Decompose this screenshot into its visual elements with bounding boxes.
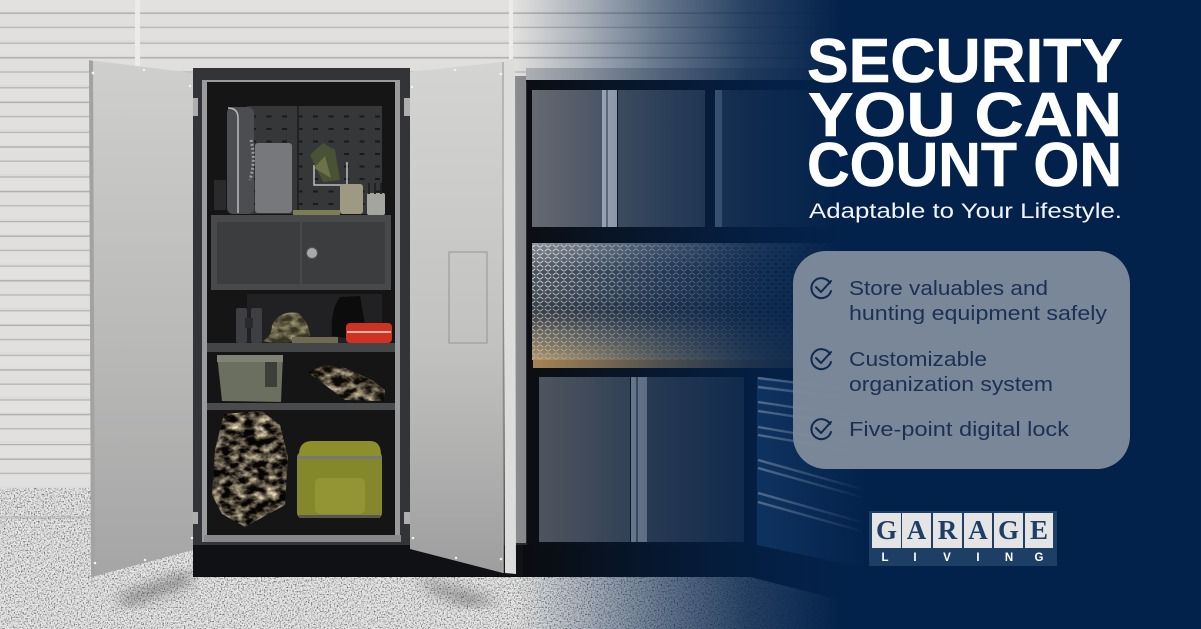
cabinet plinth [193,545,880,610]
upper cabinet doors [532,90,832,227]
title: YOU CAN [808,81,1122,150]
logo: Garage Living: G [876,515,897,545]
logo: Garage Living: N [1005,552,1013,564]
feature: store valuables: Store valuables and [849,277,1048,300]
logo: Garage Living: I [976,552,980,564]
title: SECURITY [807,27,1123,96]
navy gradient overlay [515,0,840,629]
safe bottom sill [204,535,401,542]
logo: Garage Living: L [881,552,889,564]
icon: check 2 [811,349,831,369]
feature: customizable [849,348,1053,396]
lockable drawer unit [211,215,391,290]
safe outer frame [193,68,410,576]
item: trail camera [340,184,363,214]
door access plate [449,252,487,343]
corner drawers [757,377,865,568]
item: tall gun case [214,107,254,214]
gun safe body [192,68,527,576]
safe side wall [410,82,527,545]
title [807,27,1123,200]
item: ammo box [217,355,283,402]
drawer lock [306,248,318,258]
item: black bag [332,296,366,338]
right garage cabinets [193,68,880,610]
item: binoculars [236,308,262,343]
background: speckled garage floor [0,488,1201,629]
item: green holster on bracket [310,143,347,185]
left safe door [89,60,193,577]
logo: Garage Living [869,511,1057,566]
right safe door [410,58,516,574]
title: COUNT ON [807,131,1122,200]
item: silver case [255,143,292,213]
logo: Garage Living: V [943,552,951,564]
icon: check 3 [811,419,831,439]
subtitle: Adaptable to Your Lifestyle. [809,199,1122,223]
hinge icons [192,98,410,524]
logo: Garage Living: E [1030,515,1048,545]
wood countertop [533,360,833,368]
logo: Garage Living: A [907,515,927,545]
logo: Garage Living: I [913,552,917,564]
cabinet frame [526,80,836,560]
navy right background [840,0,1201,629]
safe interior [202,80,400,542]
icon: check 1 [811,278,831,298]
door shadows on floor [118,572,500,606]
item: camo hat [263,312,338,343]
feature: customizable: Customizable [849,348,987,371]
feature: store valuables [849,277,1108,325]
feature: customizable: organization system [849,373,1053,396]
logo: Garage Living: G [998,515,1019,545]
shelf 1 [207,343,395,352]
item: small trail camera [367,183,385,215]
diamond plate backsplash [532,243,842,360]
logo: Garage Living: G [1035,552,1044,564]
item: camo backpack [212,411,288,527]
logo: Garage Living: A [968,515,988,545]
item: camo boots [307,365,385,401]
feature: store valuables: hunting equipment safely [849,302,1108,325]
feature: digital lock: Five-point digital lock [849,418,1070,441]
shelf 2 [207,403,395,410]
item: strap [293,210,340,215]
pegboard [247,106,382,344]
item: green cooler [297,441,382,518]
cabinet top band [526,68,866,80]
panel: features [793,251,1130,469]
logo: Garage Living: R [938,515,958,545]
lower cabinet doors [539,377,744,542]
background: slat wall [0,0,1201,490]
item: red case [346,323,392,343]
